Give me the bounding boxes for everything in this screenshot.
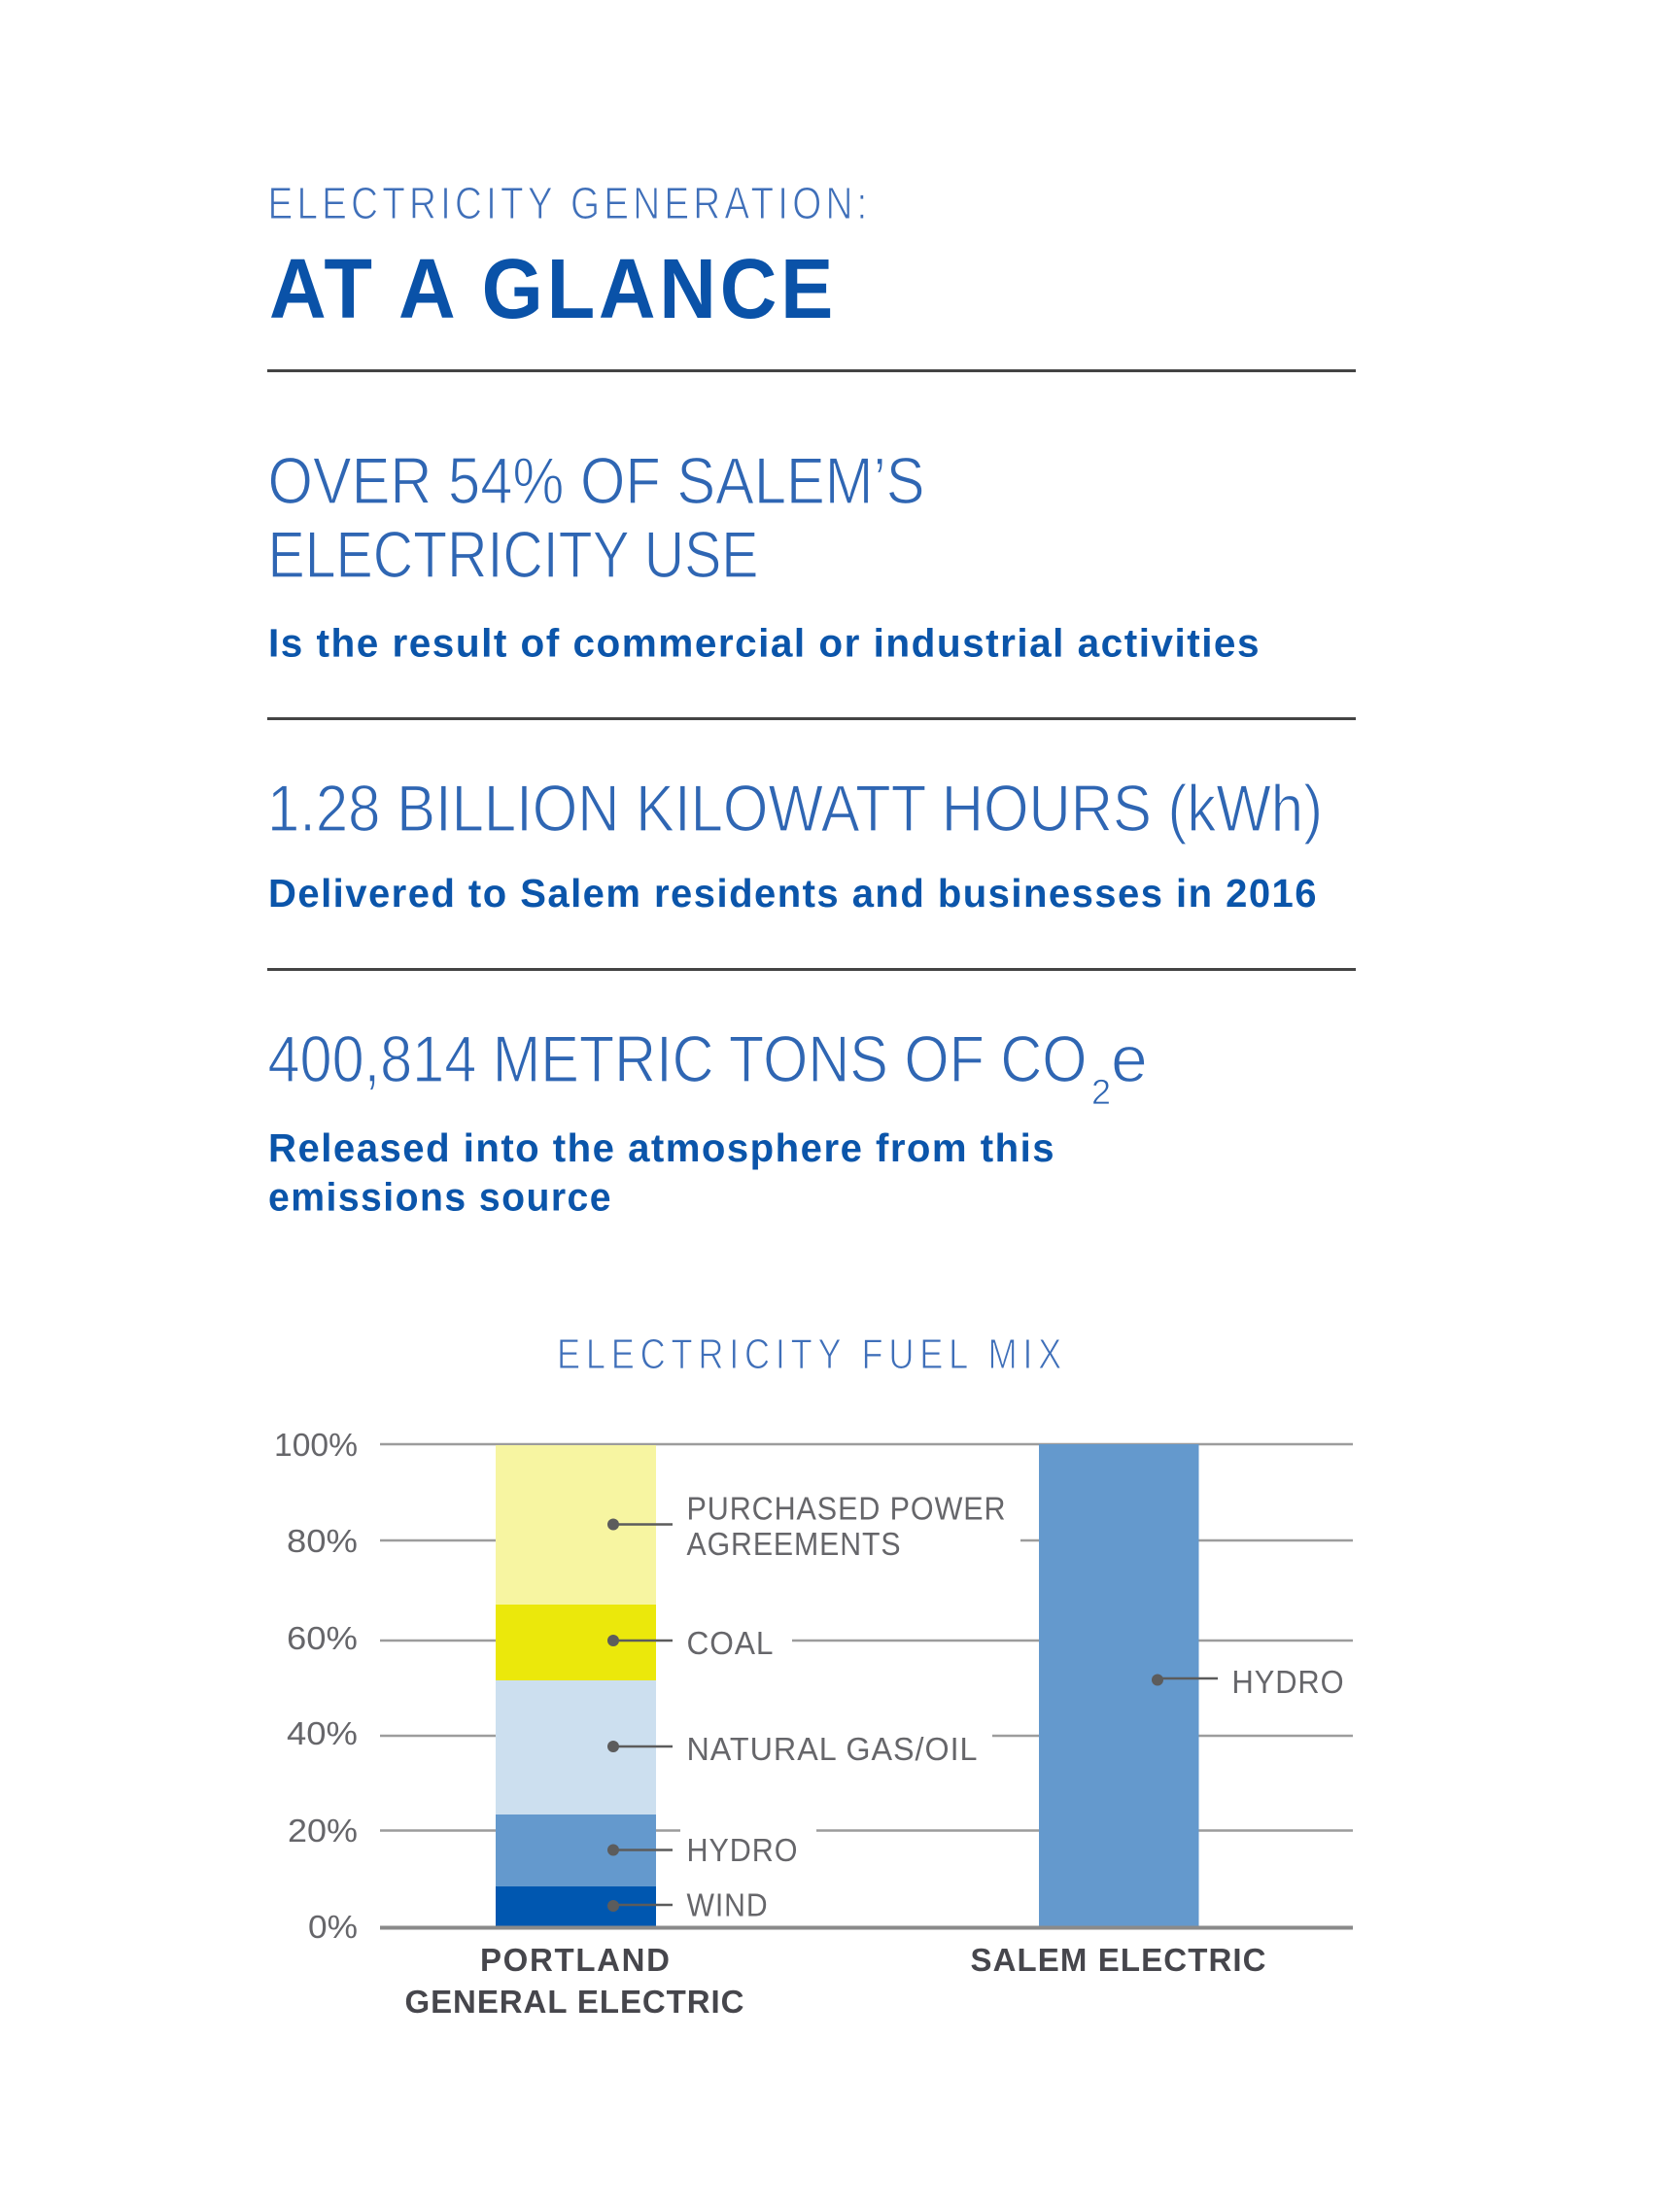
stat description: emissions source xyxy=(268,1174,612,1219)
segment: coal xyxy=(496,1605,656,1680)
stat headline: OVER 54% OF SALEM’S xyxy=(268,444,925,518)
leader: purchased power agreements: AGREEMENTS xyxy=(686,1526,902,1562)
category label: Portland General Electric: GENERAL ELECTRIC xyxy=(404,1984,744,2020)
segment: purchased power agreements xyxy=(496,1445,656,1605)
y axis labels: 20% xyxy=(288,1813,358,1849)
y axis labels xyxy=(274,1427,358,1945)
y axis labels: 40% xyxy=(287,1715,358,1751)
leader: wind: WIND xyxy=(686,1887,768,1922)
main title: AT A GLANCE xyxy=(269,242,837,336)
stacked bar: Portland General Electric xyxy=(496,1445,656,1927)
leader: coal: COAL xyxy=(686,1625,774,1661)
leader: Salem hydro: HYDRO xyxy=(1232,1664,1345,1700)
stat headline: 400,814 METRIC TONS OF CO xyxy=(268,1022,1087,1096)
segment: hydro xyxy=(496,1815,656,1886)
stat: commercial and industrial share xyxy=(268,444,1261,665)
y axis labels: 80% xyxy=(287,1523,358,1559)
leader: hydro: HYDRO xyxy=(686,1832,799,1868)
title block xyxy=(268,178,871,336)
category label: Portland General Electric: PORTLAND xyxy=(480,1942,670,1978)
leader: coal xyxy=(607,1625,774,1661)
leader: natural gas and oil: NATURAL GAS/OIL xyxy=(686,1731,978,1767)
y axis labels: 60% xyxy=(287,1620,358,1656)
stat: kilowatt hours delivered xyxy=(267,772,1323,916)
baseline axis xyxy=(380,1926,1353,1930)
stat description: Released into the atmosphere from this xyxy=(268,1125,1055,1170)
leader: purchased power agreements xyxy=(607,1491,1007,1562)
stat description: Is the result of commercial or industrial activities xyxy=(268,620,1261,665)
y axis labels: 100% xyxy=(274,1427,358,1463)
leader: hydro xyxy=(607,1832,799,1868)
category label: Salem Electric: SALEM ELECTRIC xyxy=(970,1942,1265,1978)
leader: Salem hydro xyxy=(1152,1664,1345,1700)
segment: natural gas and oil xyxy=(496,1680,656,1815)
stat: emissions xyxy=(268,1022,1148,1219)
stat headline: 2 xyxy=(1091,1072,1111,1112)
stat headline: e xyxy=(1111,1022,1148,1096)
stat headline: 1.28 BILLION KILOWATT HOURS (kWh) xyxy=(267,772,1323,846)
leader: wind xyxy=(607,1887,768,1922)
stat description: Delivered to Salem residents and businesses in 2016 xyxy=(268,871,1318,916)
chart heading: ELECTRICITY FUEL MIX xyxy=(557,1331,1067,1378)
eyebrow heading: ELECTRICITY GENERATION: xyxy=(268,178,871,228)
y axis labels: 0% xyxy=(308,1909,358,1945)
stat headline: ELECTRICITY USE xyxy=(268,518,758,592)
leader: purchased power agreements: PURCHASED POWER xyxy=(686,1491,1007,1526)
bar: Salem Electric hydro xyxy=(1039,1444,1199,1927)
segment: wind xyxy=(496,1886,656,1927)
chart: electricity fuel mix xyxy=(274,1427,1353,2020)
